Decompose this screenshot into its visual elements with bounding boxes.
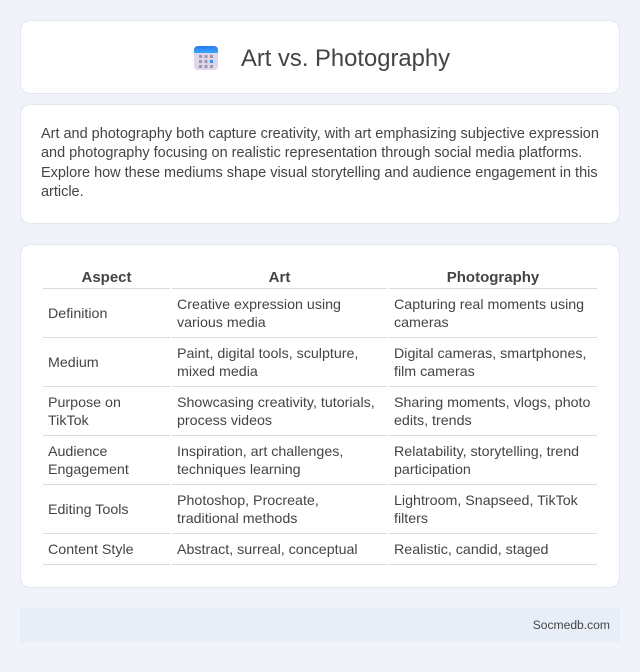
row: Audience Engagement: Engagement [48,462,129,478]
row: Purpose on TikTok [48,395,590,429]
icon: calendar [194,46,218,70]
row: Editing Tools [48,493,578,527]
row: Definition [48,297,584,331]
row: Definition: Capturing real moments using [394,297,584,313]
row: Definition: Creative expression using [177,297,341,313]
row: Medium: Paint, digital tools, sculpture, [177,346,358,362]
row: Purpose on TikTok: process videos [177,413,272,429]
row: Definition: various media [177,315,266,331]
row: Content Style: Content Style [48,542,134,558]
row: Editing Tools: Editing Tools [48,502,129,518]
intro text: and photography focusing on realistic representation through social media platforms. [41,145,582,161]
intro text: article. [41,184,84,200]
intro text [41,126,599,200]
intro text: Explore how these mediums shape visual storytelling and audience engagement in this [41,165,598,181]
row: Purpose on TikTok: Purpose on [48,395,121,411]
row: Audience Engagement: Inspiration, art challenges, [177,444,343,460]
column heading: Art: Art [269,269,290,286]
row: Audience Engagement: Relatability, storytelling, trend [394,444,579,460]
row: Editing Tools: Photoshop, Procreate, [177,493,319,509]
row: Audience Engagement: techniques learning [177,462,301,478]
row: Purpose on TikTok: Showcasing creativity, tutorials, [177,395,375,411]
row: Purpose on TikTok: Sharing moments, vlogs, photo [394,395,590,411]
row: Content Style: Realistic, candid, staged [394,542,548,558]
title: Art vs. Photography [241,45,450,72]
footer bar [20,608,620,642]
footer source text: Socmedb.com [533,618,610,632]
row: Editing Tools: Lightroom, Snapseed, TikTok [394,493,578,509]
panel: title card [20,20,620,94]
panel: introduction [20,104,620,224]
row: Editing Tools: traditional methods [177,511,297,527]
column heading: Aspect: Aspect [81,269,132,286]
row: Definition: Definition [48,306,107,322]
row: Medium: film cameras [394,364,475,380]
panel: comparison table [20,244,620,588]
row: Audience Engagement: Audience [48,444,107,460]
row: Medium: Digital cameras, smartphones, [394,346,586,362]
row: Content Style: Abstract, surreal, conceptual [177,542,358,558]
row: Editing Tools: filters [394,511,428,527]
row: Medium: mixed media [177,364,258,380]
row: Content Style [48,542,548,558]
column heading: Photography: Photography [447,269,539,286]
row: Audience Engagement: participation [394,462,471,478]
row: Medium: Medium [48,355,99,371]
row: Purpose on TikTok: TikTok [48,413,89,429]
row: Audience Engagement [48,444,579,478]
row: Definition: cameras [394,315,449,331]
row: Purpose on TikTok: edits, trends [394,413,472,429]
row: Medium [48,346,586,380]
intro text: Art and photography both capture creativity, with art emphasizing subjective expression [41,126,599,142]
